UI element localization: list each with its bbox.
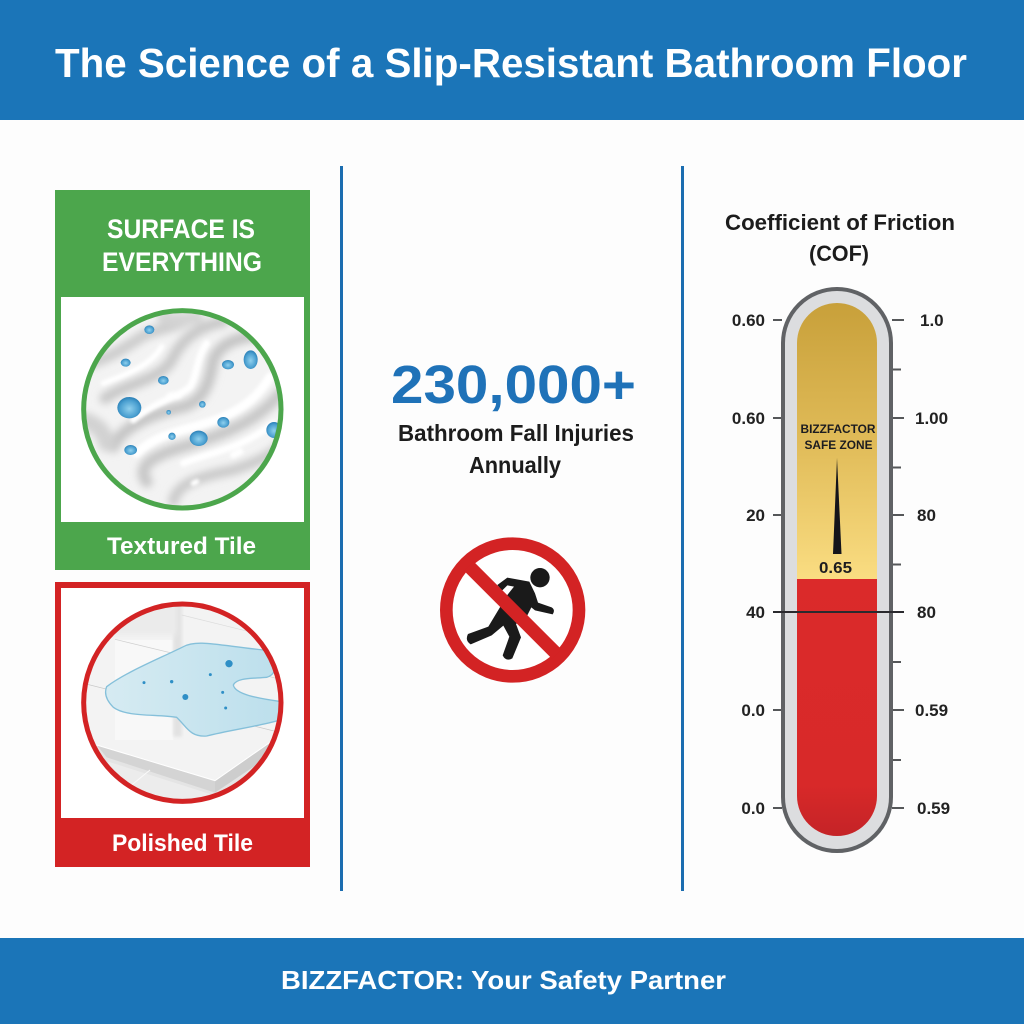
statistic: 230,000+: 230,000+ — [391, 355, 636, 415]
right scale labels: 1.0 — [920, 311, 944, 330]
column divider right — [681, 166, 684, 891]
gauge tube — [783, 289, 891, 851]
chart heading: coefficient of friction — [725, 210, 955, 266]
right scale labels: 80 — [917, 506, 936, 525]
statistic label — [398, 420, 634, 478]
needle — [833, 458, 842, 554]
illustration: polished tile with water puddle — [80, 600, 287, 810]
right scale labels: 1.00 — [915, 409, 948, 428]
gauge fill — [797, 303, 877, 837]
running figure — [467, 568, 554, 660]
right scale labels — [915, 311, 950, 818]
needle value: 0.65 — [819, 560, 852, 577]
left scale labels: 20 — [746, 506, 765, 525]
chart heading: coefficient of friction: (COF) — [809, 241, 869, 266]
panel heading: surface is everything — [102, 214, 262, 277]
safe zone label — [800, 424, 876, 452]
statistic label: Annually — [469, 452, 561, 478]
safe zone label: BIZZFACTOR — [800, 424, 876, 436]
left scale labels: 0.60 — [732, 311, 765, 330]
right scale labels: 0.59 — [917, 799, 950, 818]
panel heading: surface is everything: SURFACE IS — [107, 214, 255, 244]
right scale labels: 0.59 — [915, 701, 948, 720]
icon: no slipping sign — [446, 544, 579, 676]
illustration: textured tile with droplets — [80, 307, 287, 513]
panel heading: surface is everything: EVERYTHING — [102, 247, 262, 277]
left scale labels: 0.0 — [741, 701, 765, 720]
gauge ticks — [773, 320, 904, 808]
panel: polished tile — [55, 582, 310, 867]
droplets — [117, 325, 282, 455]
threshold line — [773, 611, 904, 613]
chart heading: coefficient of friction: Coefficient of Friction — [725, 210, 955, 235]
column divider left — [340, 166, 343, 891]
left scale labels: 0.60 — [732, 409, 765, 428]
footer text: BIZZFACTOR: Your Safety Partner — [281, 965, 726, 995]
water puddle — [106, 643, 282, 736]
footer banner — [0, 938, 1024, 1024]
safe zone label: SAFE ZONE — [804, 440, 873, 452]
statistic label: Bathroom Fall Injuries — [398, 420, 634, 446]
header banner — [0, 0, 1024, 120]
caption: polished tile: Polished Tile — [112, 830, 253, 857]
caption: textured tile: Textured Tile — [107, 533, 256, 560]
slab front faces — [96, 746, 254, 795]
panel: textured tile — [55, 190, 310, 570]
left scale labels: 40 — [746, 603, 765, 622]
chart: friction gauge — [732, 289, 950, 851]
right scale labels: 80 — [917, 603, 936, 622]
left scale labels: 0.0 — [741, 799, 765, 818]
left scale labels — [732, 311, 765, 818]
title: The Science of a Slip-Resistant Bathroom Floor — [55, 40, 967, 86]
